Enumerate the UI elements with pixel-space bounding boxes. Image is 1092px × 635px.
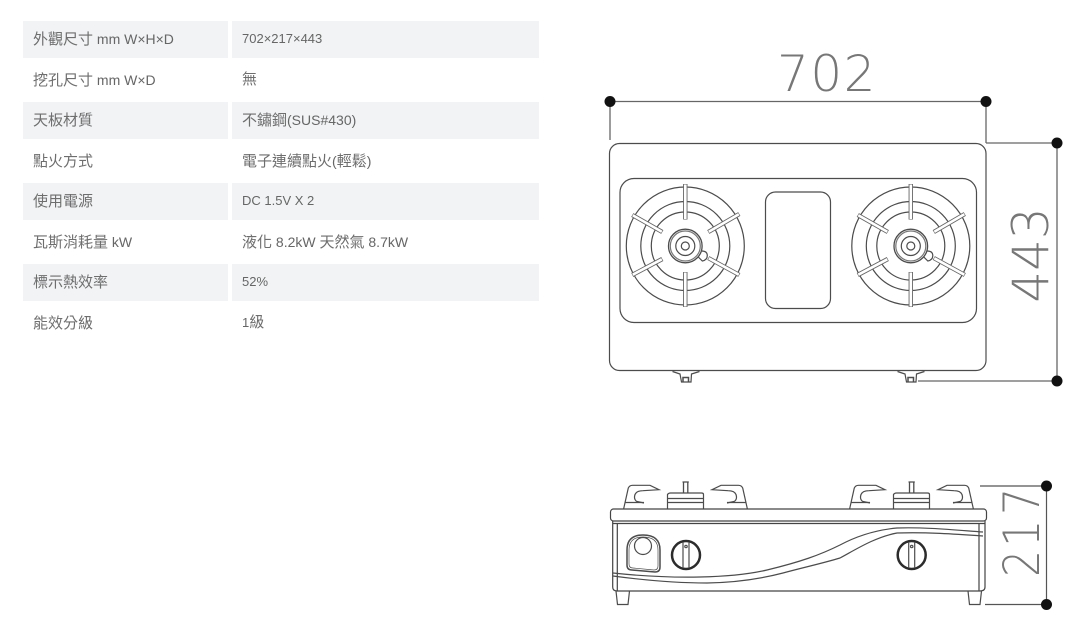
row: outer dimensions — [23, 21, 539, 58]
row: efficiency grade: 1級 — [242, 314, 264, 330]
height dimension 217 — [980, 480, 1052, 610]
row: top plate material — [23, 102, 539, 139]
right burner — [852, 184, 970, 307]
left grate and burner — [624, 482, 748, 510]
burner tray — [620, 178, 976, 322]
stove body — [613, 521, 985, 591]
right foot — [968, 591, 982, 604]
centre panel — [766, 192, 830, 308]
row: thermal efficiency: 標示熱效率 — [33, 274, 108, 291]
row: power source: DC 1.5V X 2 — [242, 193, 314, 208]
row: cut-out dimensions — [33, 70, 257, 88]
right grate and burner — [850, 482, 974, 510]
front view of stove — [610, 482, 986, 604]
row: outer dimensions: 外觀尺寸 mm W×H×D — [33, 31, 174, 48]
right knob — [898, 541, 926, 569]
width dimension 702 — [604, 45, 992, 143]
row: efficiency grade: 能效分級 — [33, 314, 93, 332]
label 443: 443 — [1002, 207, 1060, 303]
row: gas consumption: 液化 8.2kW 天然氣 8.7kW — [242, 234, 408, 250]
row: cut-out dimensions: 無 — [242, 70, 257, 88]
top plate — [610, 509, 986, 521]
stove outline top view — [610, 144, 986, 370]
label 217: 217 — [993, 488, 1051, 577]
row: efficiency grade — [33, 314, 264, 332]
left leg — [672, 372, 700, 382]
row: ignition: 電子連續點火(輕鬆) — [242, 152, 371, 170]
row: cut-out dimensions: 挖孔尺寸 mm W×D — [33, 72, 156, 88]
left foot — [616, 591, 630, 604]
spec table — [23, 21, 539, 332]
label 702: 702 — [777, 45, 877, 103]
igniter button — [627, 535, 660, 572]
row: ignition: 點火方式 — [33, 152, 93, 170]
row: top plate material: 天板材質 — [33, 112, 93, 129]
depth dimension 443 — [918, 138, 1062, 386]
row: thermal efficiency: 52% — [242, 274, 268, 289]
row: power source — [23, 183, 539, 220]
top view of stove — [610, 144, 986, 382]
row: outer dimensions: 702×217×443 — [242, 31, 322, 46]
row: thermal efficiency — [23, 264, 539, 301]
row: ignition — [33, 152, 371, 170]
row: gas consumption — [33, 234, 408, 250]
row: power source: 使用電源 — [33, 193, 93, 210]
row: top plate material: 不鏽鋼(SUS#430) — [242, 112, 356, 129]
row: gas consumption: 瓦斯消耗量 kW — [33, 234, 132, 250]
left burner — [626, 184, 744, 307]
left knob — [672, 541, 700, 569]
right leg — [898, 372, 924, 382]
wave decoration lines — [613, 528, 983, 583]
